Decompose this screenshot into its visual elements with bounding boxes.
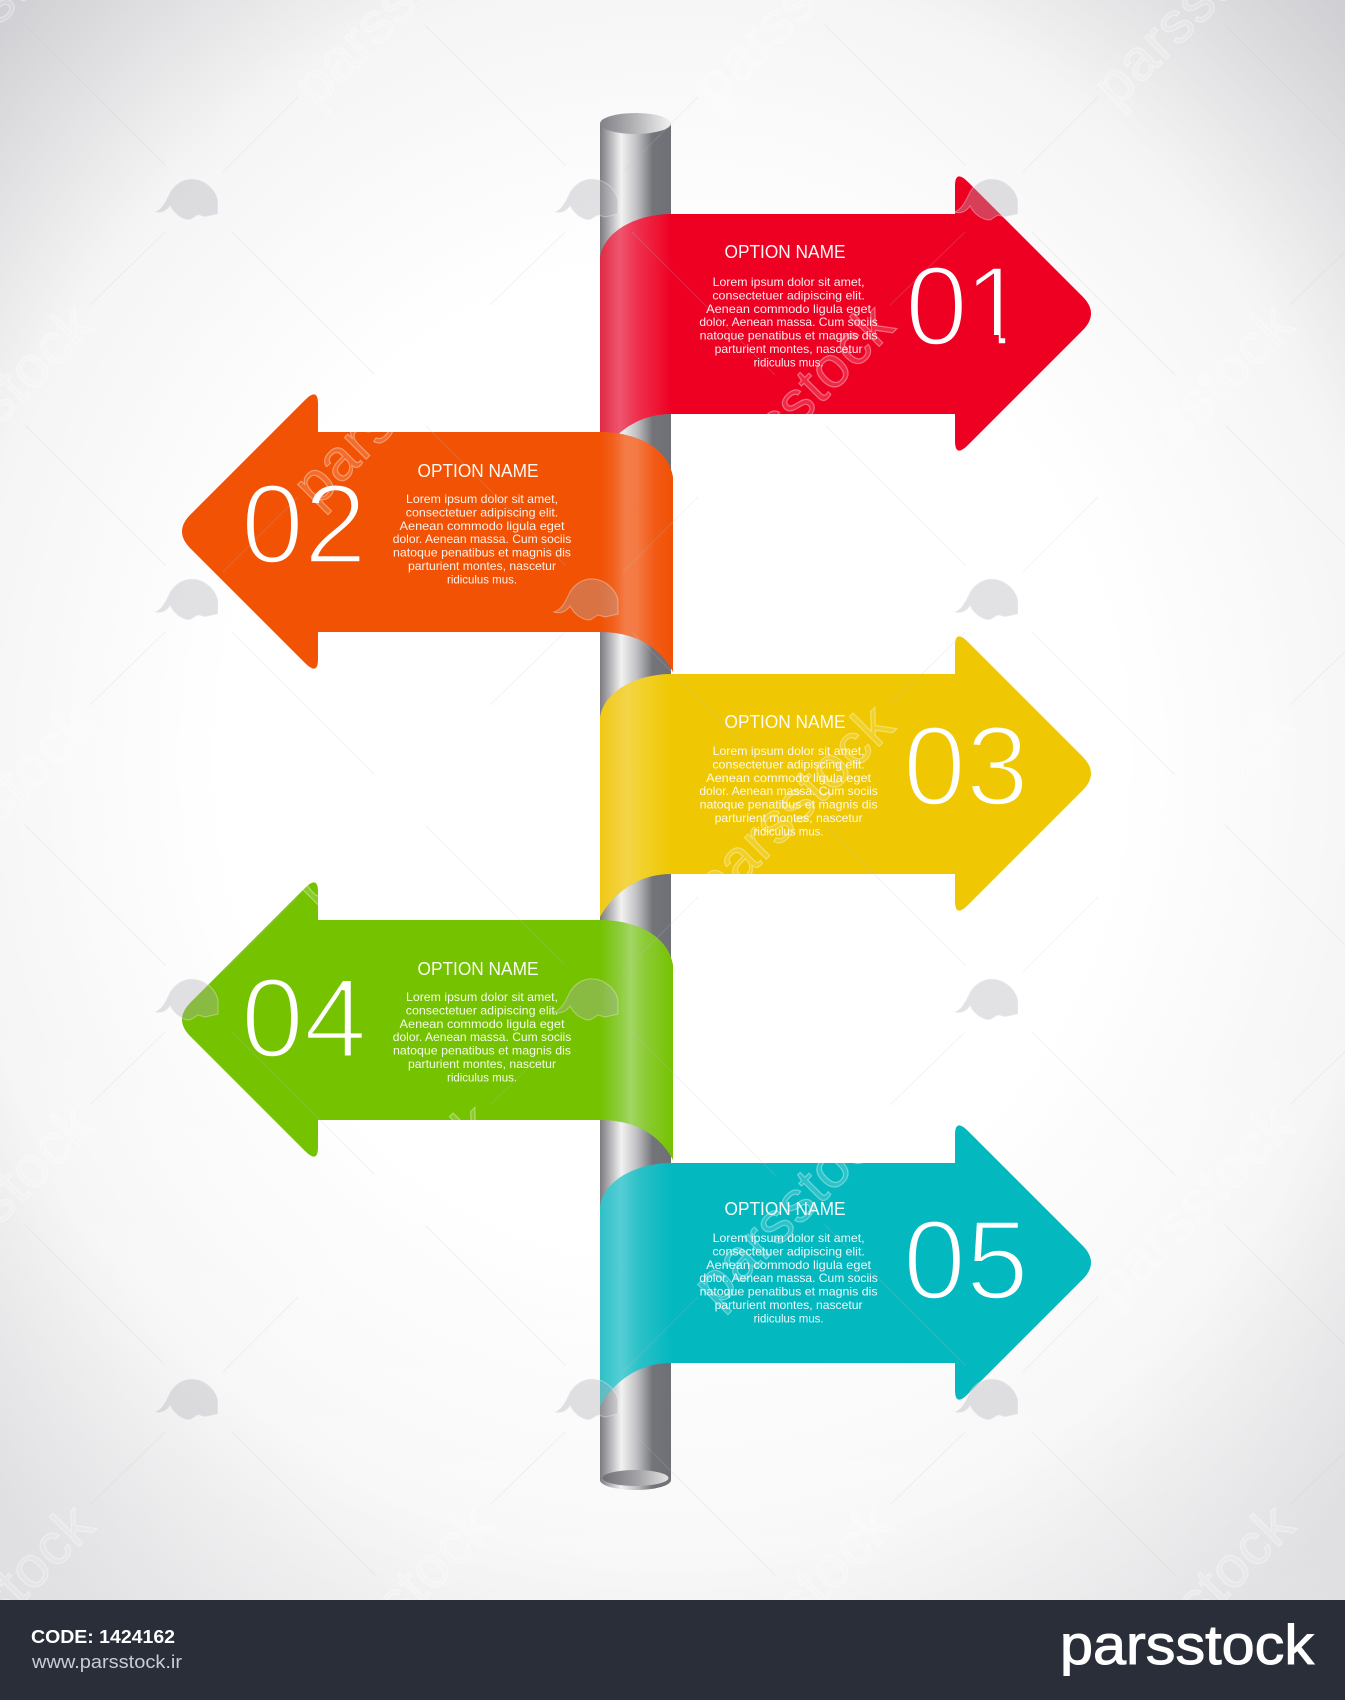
body text 05: parturient montes, nascetur (715, 1298, 863, 1312)
body text 02: ridiculus mus. (447, 572, 517, 586)
option name 04: OPTION NAME (418, 959, 538, 979)
body text 01: dolor. Aenean massa. Cum sociis (699, 315, 878, 329)
arrow 03 yellow (600, 636, 1091, 917)
pole (600, 113, 671, 1490)
watermark overlay: parsstock (680, 291, 907, 518)
body text 02: parturient montes, nascetur (408, 559, 556, 573)
body text 05 (699, 1231, 878, 1325)
body text 01: Lorem ipsum dolor sit amet, (713, 275, 865, 289)
body text 05: dolor. Aenean massa. Cum sociis (699, 1271, 878, 1285)
body text 03: consectetuer adipiscing elit. (712, 757, 865, 771)
logo wordmark: parsstock (1060, 1613, 1315, 1676)
body text 04: dolor. Aenean massa. Cum sociis (393, 1030, 571, 1044)
watermark overlay: parsstock (1080, 691, 1307, 918)
body text 05: Aenean commodo ligula eget (706, 1258, 872, 1272)
watermark overlay: parsstock (680, 691, 907, 918)
watermark overlay: parsstock (1080, 291, 1307, 518)
body text 04: Lorem ipsum dolor sit amet, (406, 990, 558, 1004)
body text 04: natoque penatibus et magnis dis (393, 1044, 571, 1058)
body text 03: Aenean commodo ligula eget (706, 771, 872, 785)
body text 01: parturient montes, nascetur (715, 342, 863, 356)
option name 02: OPTION NAME (418, 461, 538, 481)
body text 01 (699, 275, 878, 369)
watermark overlay: parsstock (280, 1091, 507, 1318)
product code: CODE: 1424162 (31, 1626, 175, 1647)
body text 02: dolor. Aenean massa. Cum sociis (393, 532, 571, 546)
body text 03: ridiculus mus. (754, 824, 824, 838)
body text 03 (699, 744, 878, 838)
arrow 01 red (600, 176, 1091, 457)
body text 01: Aenean commodo ligula eget (706, 302, 872, 316)
body text 04: parturient montes, nascetur (408, 1057, 556, 1071)
body text 04: Aenean commodo ligula eget (400, 1017, 565, 1031)
number 01: 01 (905, 243, 1027, 369)
body text 01: ridiculus mus. (754, 355, 824, 369)
body text 05: Lorem ipsum dolor sit amet, (713, 1231, 865, 1245)
option name 05: OPTION NAME (724, 1199, 846, 1219)
body text 02: consectetuer adipiscing elit. (406, 505, 558, 519)
number 04: 04 (241, 955, 367, 1081)
body text 05: natoque penatibus et magnis dis (700, 1285, 878, 1299)
body text 05: consectetuer adipiscing elit. (712, 1244, 865, 1258)
body text 04 (393, 990, 571, 1084)
body text 04: ridiculus mus. (447, 1070, 517, 1084)
body text 01: consectetuer adipiscing elit. (712, 288, 865, 302)
option name 03: OPTION NAME (724, 712, 846, 732)
watermark overlay: parsstock (680, 1091, 907, 1318)
body text 03: parturient montes, nascetur (715, 811, 863, 825)
body text 03: natoque penatibus et magnis dis (700, 798, 878, 812)
watermark overlay: parsstock (280, 291, 507, 518)
number 02: 02 (241, 461, 367, 587)
body text 05: ridiculus mus. (754, 1311, 824, 1325)
body text 03: Lorem ipsum dolor sit amet, (713, 744, 865, 758)
body text 02: Aenean commodo ligula eget (400, 519, 565, 533)
body text 02 (393, 492, 571, 586)
arrow 05 teal (600, 1125, 1091, 1406)
arrow 04 green (182, 882, 673, 1160)
watermark overlay: parsstock (280, 691, 507, 918)
number 05: 05 (903, 1197, 1029, 1323)
footer bar (0, 1600, 1345, 1700)
body text 03: dolor. Aenean massa. Cum sociis (699, 784, 878, 798)
body text 04: consectetuer adipiscing elit. (406, 1003, 558, 1017)
body text 02: natoque penatibus et magnis dis (393, 546, 571, 560)
body text 01: natoque penatibus et magnis dis (700, 329, 878, 343)
arrow 02 orange (182, 394, 673, 672)
number 03: 03 (903, 703, 1029, 829)
watermark overlay: parsstock (1080, 1091, 1307, 1318)
body text 02: Lorem ipsum dolor sit amet, (406, 492, 558, 506)
option name 01: OPTION NAME (724, 242, 846, 262)
website url: www.parsstock.ir (31, 1652, 182, 1672)
